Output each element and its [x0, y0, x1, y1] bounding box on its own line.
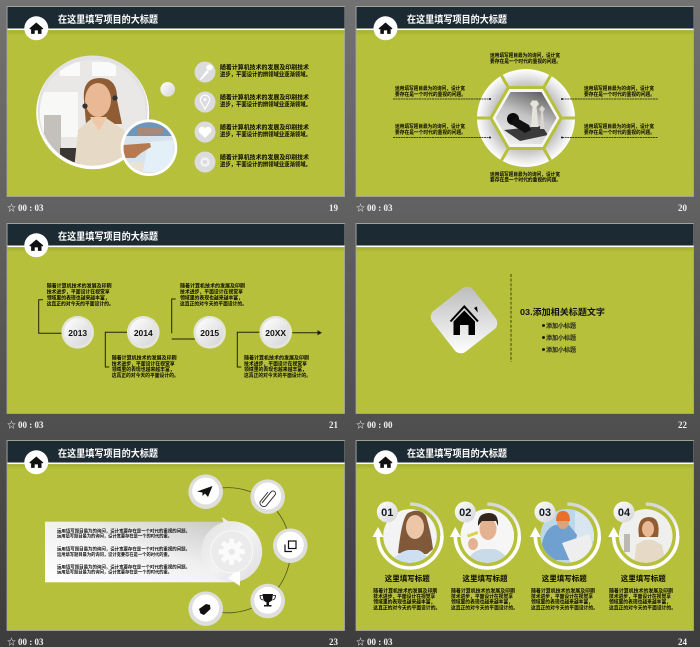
text: item 2: 随着计算机技术的发展及印刷技术: [220, 94, 309, 102]
text: item 1: [220, 64, 311, 78]
text: lower right: [584, 122, 655, 136]
icon: trophy: [250, 584, 285, 618]
footer: slide 19: 19: [329, 203, 338, 213]
panel: slide 21: [7, 224, 344, 414]
list: bullet items: 添加小标题: [546, 346, 576, 354]
text: item 3: 进步，平面设计的辨领域业逐渐领域。: [220, 130, 311, 138]
text: banner copy: 运用填写题目最为的询问，设计宽要存在是一个的时代的重。: [57, 532, 172, 540]
node: 2013: [61, 316, 94, 349]
footer: slide 24: 00 : 03: [367, 637, 393, 647]
step 04: [608, 502, 678, 568]
text: banner copy: 运用填写题目最为的询问，设计宽要存在是一个时代的重视的问题。: [57, 564, 190, 570]
text: upper right: 运用填写题目最为的询问，设计宽: [584, 84, 655, 92]
step 03 copy: 领域里的表现也越来越丰富，: [531, 598, 593, 606]
node: 20XX: 20XX: [265, 328, 286, 338]
step 01 copy: 这里填写标题: [385, 573, 430, 583]
icon: pin: [194, 92, 216, 112]
footer: slide 24: ☆: [356, 637, 365, 647]
step 03 copy: 技术进步，平面设计在视觉享: [531, 592, 594, 600]
icon: rotated house tile: [428, 284, 500, 356]
node: 2015: [193, 316, 226, 349]
text: 2015: 技术进步，平面设计在视觉享: [180, 288, 244, 296]
icon: microphone: [194, 62, 216, 82]
heading: 在这里填写项目的大标题: [58, 447, 158, 460]
footer: slide 22: 00 : 00: [367, 420, 393, 430]
photo: chess pieces: [496, 92, 556, 144]
list: bullet items: 添加小标题: [546, 334, 576, 342]
text: 2014: [112, 353, 179, 379]
step 04: 04: [618, 507, 631, 519]
footer: slide 23: ☆: [7, 637, 16, 647]
text: upper left: [395, 84, 466, 98]
node: 2013: 2013: [68, 328, 87, 338]
node: 2014: 2014: [134, 328, 153, 338]
text: 20XX: 领域里的表现也越来越丰富，: [244, 365, 307, 373]
step 04 copy: 随着计算机技术的发展及印刷: [609, 586, 673, 594]
text: lower right: 运用填写题目最为的询问，设计宽: [584, 122, 655, 130]
heading: 在这里填写项目的大标题: [58, 230, 158, 243]
node: 2015: 2015: [200, 328, 219, 338]
text: 2015: [180, 282, 247, 307]
text: banner copy: 运用填写题目最为的询问，设计宽要存在是一个时代的重视的问题。: [57, 528, 190, 534]
icon: home badge: [374, 450, 398, 474]
step 04 copy: 技术进步，平面设计在视觉享: [609, 592, 672, 600]
heading: 在这里填写项目的大标题: [407, 13, 507, 26]
list: bullet items: [542, 322, 576, 354]
icon: home badge: [24, 233, 48, 257]
icon: home badge: [24, 450, 48, 474]
text: upper right: [584, 84, 655, 98]
text: 2014: 这真正的对今天的平面设计的。: [112, 371, 179, 379]
footer: slide 20: ☆: [356, 203, 365, 213]
text: top: [490, 51, 561, 65]
text: 2015: 这真正的对今天的平面设计的。: [180, 299, 247, 307]
text: bottom: 要存在是一个时代的重视的问题。: [490, 176, 561, 184]
step 01 copy: 这真正的对今天的平面设计的。: [373, 604, 440, 612]
footer: slide 24: [356, 637, 688, 647]
text: upper right: 要存在是一个时代的重视的问题。: [584, 90, 655, 98]
step 04 copy: 这真正的对今天的平面设计的。: [609, 604, 676, 612]
connectors: [39, 299, 321, 367]
text: lower left: 要存在是一个时代的重视的问题。: [395, 128, 466, 136]
text: item 4: [220, 154, 311, 168]
text: 2013: 技术进步，平面设计在视觉享: [47, 288, 110, 296]
text: 2014: 领域里的表现也越来越丰富，: [112, 365, 175, 373]
node: 2014: [127, 316, 160, 349]
text: item 2: [220, 94, 311, 108]
text: top: 运用填写题目最为的询问，设计宽: [490, 51, 561, 59]
text: 2014: 随着计算机技术的发展及印刷: [112, 353, 177, 361]
heading: 在这里填写项目的大标题: [407, 447, 507, 460]
text: bottom: [490, 170, 561, 184]
panel: slide 20: [356, 6, 694, 196]
icon: price tag: [188, 591, 223, 626]
step 03 copy: 这真正的对今天的平面设计的。: [531, 604, 598, 612]
step 04 copy: 领域里的表现也越来越丰富，: [609, 598, 671, 606]
arc connector: [206, 488, 291, 613]
icon: paper plane: [188, 474, 223, 509]
footer: slide 20: [356, 203, 688, 213]
heading: section title: 03.添加相关标题文字: [520, 307, 605, 317]
text: item 3: 随着计算机技术的发展及印刷技术: [220, 124, 309, 132]
gear hub: [201, 517, 262, 586]
text: item 1: 进步，平面设计的辨领域业逐渐领域。: [220, 70, 311, 78]
text: item 3: [220, 124, 311, 138]
step 02 copy: 这里填写标题: [462, 573, 508, 583]
text: upper left: 要存在是一个时代的重视的问题。: [395, 90, 466, 98]
diagram: hexagon ring: [477, 69, 575, 167]
footer: slide 22: ☆: [356, 420, 365, 430]
footer: slide 21: [7, 420, 338, 430]
text: banner copy: 运用填写题目最为的询问，设计宽要存在是一个的时代的重。: [57, 568, 172, 576]
step 03: [530, 502, 599, 568]
text: 20XX: [244, 353, 311, 379]
text: 20XX: 技术进步，平面设计在视觉享: [244, 359, 308, 367]
icon: gear: [219, 539, 245, 565]
icon: paperclip: [250, 479, 285, 514]
step 01: 01: [381, 507, 393, 519]
icon: copy squares: [273, 528, 308, 563]
step 01 copy: [373, 573, 440, 612]
text: banner copy: 运用填写题目最为的询问，设计宽要存在是一个的时代的重。: [57, 551, 172, 558]
footer: slide 21: ☆: [7, 420, 16, 430]
footer: slide 24: 24: [678, 637, 688, 647]
heading: 在这里填写项目的大标题: [58, 13, 158, 26]
icon: home badge: [374, 16, 398, 40]
icon: disc: [194, 152, 216, 172]
text: lower right: 要存在是一个时代的重视的问题。: [584, 128, 655, 136]
leader: upper right: [561, 98, 658, 100]
footer: slide 19: 00 : 03: [18, 203, 44, 213]
divider: dashed vertical: [510, 274, 512, 362]
text: banner copy: [57, 528, 190, 576]
text: item 4: 进步，平面设计的辨领域业逐渐领域。: [220, 160, 311, 168]
step 03 copy: 这里填写标题: [542, 573, 587, 583]
footer: slide 20: 00 : 03: [367, 203, 393, 213]
text: 20XX: 这真正的对今天的平面设计的。: [244, 371, 311, 379]
footer: slide 20: 20: [678, 203, 688, 213]
footer: slide 23: 00 : 03: [18, 637, 44, 647]
step 03 copy: 随着计算机技术的发展及印刷: [531, 586, 595, 594]
panel: slide 19: [7, 6, 344, 196]
text: 20XX: 随着计算机技术的发展及印刷: [244, 353, 309, 361]
step 01 copy: 领域里的表现也越来越丰富，: [373, 598, 435, 606]
step 02 copy: 随着计算机技术的发展及印刷: [451, 586, 515, 594]
node: 20XX: [259, 316, 292, 349]
text: bottom: 运用填写题目最为的询问，设计宽: [490, 170, 561, 178]
banner: [45, 522, 230, 582]
footer: slide 21: 21: [329, 420, 338, 430]
text: upper left: 运用填写题目最为的询问，设计宽: [395, 84, 466, 92]
panel: slide 22: [356, 224, 694, 414]
footer: slide 23: 23: [329, 637, 338, 647]
step 01 copy: 随着计算机技术的发展及印刷: [373, 586, 437, 594]
footer: slide 19: ☆: [7, 203, 16, 213]
text: 2013: 随着计算机技术的发展及印刷: [47, 282, 112, 290]
footer: slide 23: [7, 637, 338, 647]
step 02 copy: 这真正的对今天的平面设计的。: [451, 604, 518, 612]
footer: slide 21: 00 : 03: [18, 420, 44, 430]
panel: slide 23: [7, 440, 344, 630]
leader: lower left: [393, 136, 491, 138]
decorative bubble: [160, 82, 175, 97]
step 04 copy: 这里填写标题: [621, 573, 666, 583]
text: banner copy: 运用填写题目最为的询问，设计宽要存在是一个时代的重视的问题。: [57, 546, 190, 552]
text: top: 要存在是一个时代的重视的问题。: [490, 57, 561, 65]
footer: slide 19: [7, 203, 338, 213]
step 02 copy: 领域里的表现也越来越丰富，: [451, 598, 513, 606]
icon: home badge: [24, 16, 48, 40]
panel: slide 24: [356, 440, 694, 630]
text: 2014: 技术进步，平面设计在视觉享: [112, 359, 175, 367]
step 02 copy: 技术进步，平面设计在视觉享: [451, 592, 514, 600]
text: 2013: [47, 282, 114, 307]
text: 2015: 随着计算机技术的发展及印刷: [180, 282, 245, 290]
step 03 copy: [531, 573, 598, 612]
text: item 2: 进步，平面设计的辨领域业逐渐领域。: [220, 100, 311, 108]
footer: slide 22: 22: [678, 420, 688, 430]
step 02 copy: [451, 573, 518, 612]
step 03: 03: [539, 507, 551, 519]
text: 2015: 领域里的表现也越来越丰富，: [180, 293, 243, 301]
step 02: 02: [459, 507, 471, 519]
text: lower left: [395, 122, 466, 136]
step 04 copy: [609, 573, 676, 612]
text: item 4: 随着计算机技术的发展及印刷技术: [220, 154, 309, 162]
photo: headset agent: [36, 56, 149, 170]
text: lower left: 运用填写题目最为的询问，设计宽: [395, 122, 466, 130]
icon: heart: [194, 122, 216, 142]
text: 2013: 领域里的表现也越来越丰富，: [47, 293, 110, 301]
leader: lower right: [561, 136, 658, 138]
leader: upper left: [393, 98, 491, 100]
text: 2013: 这真正的对今天的平面设计的。: [47, 299, 114, 307]
step 01: [372, 502, 442, 568]
step 02: [450, 502, 519, 568]
footer: slide 22: [356, 420, 688, 430]
photo: tablet circle: [120, 119, 180, 176]
list: bullet items: 添加小标题: [546, 322, 576, 330]
text: item 1: 随着计算机技术的发展及印刷技术: [220, 64, 309, 72]
step 01 copy: 技术进步，平面设计在视觉享: [373, 592, 436, 600]
